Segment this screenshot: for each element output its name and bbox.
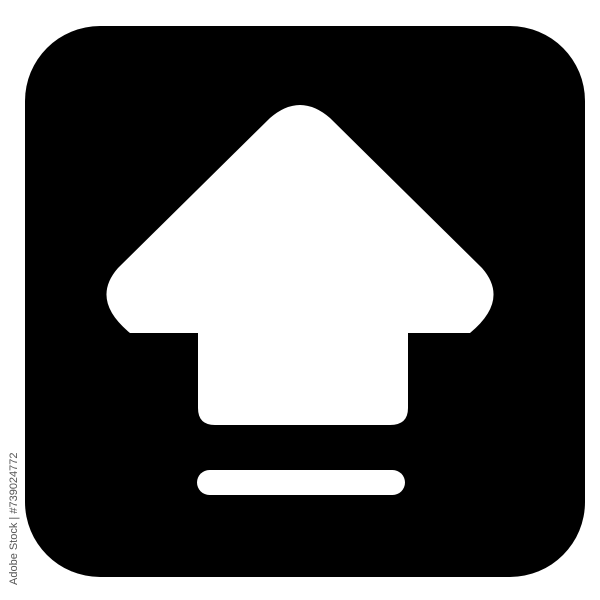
text: stock id: Adobe Stock | #739024772 [8,452,20,585]
icon: baseline bar [197,470,405,495]
icon: arrow up [106,105,494,425]
